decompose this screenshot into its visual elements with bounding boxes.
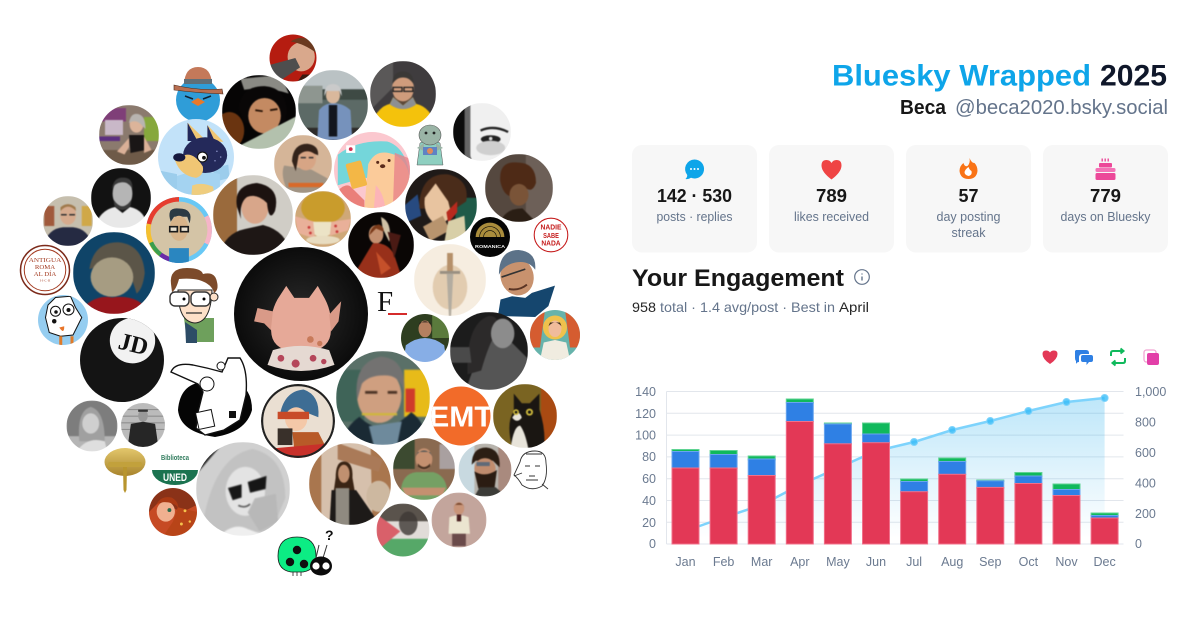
avatar: woman in striped top [309, 443, 391, 525]
avatar: illustrated saint man [530, 310, 580, 360]
avatar: Nadie Sabe Nada: SABE [543, 231, 559, 240]
stat card: days on Bluesky: days on Bluesky [1060, 209, 1151, 224]
avatar: golden pin [104, 448, 146, 493]
avatar: drawn man with rainbow ring [145, 197, 212, 263]
avatar: hands with tea cup [295, 191, 351, 247]
icon: speech bubble [685, 159, 704, 179]
legend icons [1042, 348, 1159, 366]
left axis labels: 20 [642, 516, 656, 530]
avatar: Nadie Sabe Nada: NADA [541, 239, 561, 248]
icon: reposts [1111, 348, 1125, 366]
icon: info [855, 270, 869, 284]
avatar: JD eight ball [80, 318, 164, 402]
stat card: day posting streak: streak [952, 225, 986, 240]
title: Bluesky Wrapped [832, 60, 1091, 92]
month labels: Mar [751, 555, 772, 569]
avatar: Palestine flag overlay [376, 504, 430, 557]
stat card: likes received [769, 145, 894, 252]
right axis labels: 200 [1135, 507, 1156, 521]
avatar: JD eight ball: JD [116, 328, 151, 361]
avatar: pilot illustration [261, 384, 335, 458]
left axis labels: 60 [642, 472, 656, 486]
bar: Apr [786, 399, 813, 544]
stat card: posts and replies: 142 · 530 [657, 185, 732, 206]
avatar: Antigua Roma al Dia [20, 246, 70, 294]
bar: Oct [1015, 472, 1042, 544]
left axis labels: 100 [635, 428, 656, 442]
avatar: woman in hoodie [274, 135, 332, 193]
avatar: man with pencil in mouth [336, 351, 430, 445]
right axis labels [1135, 385, 1166, 551]
engagement chart [635, 385, 1166, 569]
avatar: Biblioteca UNED logo: Biblioteca [161, 453, 190, 462]
right axis labels: 600 [1135, 446, 1156, 460]
avatar: Rembrandt self portrait [485, 154, 553, 222]
icon: heart [822, 160, 842, 180]
avatar: Bluey dog [158, 119, 234, 195]
avatar: pink ceramic cat teapot [234, 247, 368, 381]
avatar: otter with phone [334, 132, 410, 208]
avatar: cartoon fox on blue [38, 295, 88, 345]
avatar: black and white eye [453, 103, 511, 161]
avatar cloud [20, 34, 580, 576]
avatar: EMT logo: EMT [429, 401, 493, 433]
avatar: cat portrait [493, 384, 557, 448]
heading: Your Engagement: Your Engagement [632, 265, 844, 292]
bar: Mar [748, 456, 775, 544]
engagement summary: April [839, 299, 869, 315]
avatar: bearded man looking down [458, 444, 512, 496]
avatar: curly haired woman [213, 175, 293, 255]
avatar: crocodile with book cartoon [171, 358, 252, 437]
stat card: likes received: 789 [816, 185, 847, 206]
left axis labels: 40 [642, 494, 656, 508]
bar: Dec [1091, 513, 1118, 544]
bar: Feb [710, 450, 737, 544]
avatar: small bug with question mark [310, 527, 334, 576]
month labels: Dec [1093, 555, 1116, 569]
bar: Jan [672, 450, 699, 544]
avatar: Nadie Sabe Nada [534, 218, 568, 252]
month labels: Jul [906, 555, 922, 569]
engagement summary: 958 [632, 299, 656, 315]
stat card: posts and replies [632, 145, 757, 252]
avatar: Romanica logo: ROMANICA [475, 244, 506, 250]
bar: Sep [977, 480, 1004, 544]
bar: May [824, 423, 851, 544]
left axis labels: 80 [642, 450, 656, 464]
avatar: black and white woman small [66, 400, 118, 452]
avatar: Antigua Roma al Dia: I·I·C·II [40, 278, 51, 282]
avatar: dagger illustration [414, 244, 486, 316]
avatar: F logo: F [377, 286, 393, 318]
avatar: dark black and white woman [450, 312, 528, 390]
stat card: day posting streak: day posting [936, 209, 1000, 224]
left axis labels: 140 [635, 385, 656, 399]
bar: Jun [862, 423, 890, 544]
avatar: blue bird with hat [174, 67, 223, 122]
avatar: bearded man black and white [91, 168, 151, 228]
avatar: red-haired doll [149, 488, 197, 536]
month labels: May [826, 555, 850, 569]
stat card: days on Bluesky: 779 [1090, 185, 1121, 206]
avatar: painted woman with red hand [405, 169, 477, 241]
bar: Jul [901, 479, 928, 544]
right axis labels: 0 [1135, 537, 1142, 551]
avatar: woman in bookshop [99, 105, 159, 165]
avatar: cartoon man with glasses [170, 268, 218, 343]
bar: Aug [939, 458, 966, 544]
avatar: blonde woman with sunglasses [196, 442, 290, 536]
avatar: man in light blue shirt [401, 314, 449, 362]
avatar: smiling man cutout in blue shirt [496, 250, 555, 317]
stat card: posts and replies: posts · replies [656, 209, 733, 224]
avatar: green mushroom creature [278, 537, 316, 576]
stat card: day posting streak: 57 [958, 185, 978, 206]
month labels: Jan [675, 555, 696, 569]
avatar: Antigua Roma al Dia: ANTIGUA [29, 257, 61, 264]
cumulative area [686, 398, 1105, 544]
avatar: Antigua Roma al Dia: AL DÍA [34, 270, 56, 278]
cumulative line [686, 394, 1108, 531]
bars: red likes, blue replies, green reposts [672, 399, 1118, 544]
month labels: Feb [713, 555, 734, 569]
avatar: EMT logo [429, 386, 493, 446]
icon: likes [1042, 350, 1058, 364]
avatar: red background selfie [270, 34, 316, 82]
avatar: tiara woman [215, 75, 296, 149]
month labels: Jun [866, 555, 886, 569]
icon: replies [1075, 350, 1093, 365]
left axis labels: 0 [649, 537, 656, 551]
user name and handle: @beca2020.bsky.social [955, 97, 1168, 119]
left axis labels: 120 [635, 407, 656, 421]
avatar: smiling man in green shirt [393, 438, 455, 500]
month labels: Aug [941, 555, 963, 569]
month labels: Apr [790, 555, 810, 569]
stat card: likes received: likes received [794, 209, 869, 224]
avatar: painted child on blue [73, 232, 155, 314]
avatar: green Cthulhu mascot [417, 125, 443, 165]
right axis labels: 800 [1135, 416, 1156, 430]
icon: quotes [1144, 350, 1159, 365]
engagement summary: total · 1.4 avg/post · Best in [660, 299, 835, 315]
avatar: Biblioteca UNED logo [152, 453, 198, 485]
month labels: Sep [979, 555, 1001, 569]
avatar: F logo [377, 286, 407, 318]
avatar: man in dark suit on stripes [121, 403, 165, 447]
avatar: small bug with question mark: ? [325, 527, 334, 543]
icon: flame [960, 158, 978, 179]
avatar: man in yellow jacket [370, 61, 436, 127]
stat card: days on Bluesky [1043, 145, 1168, 252]
icon: birthday cake [1096, 158, 1116, 180]
title: 2025 [1100, 60, 1167, 92]
right axis labels: 1,000 [1135, 385, 1166, 399]
avatar: man with glasses and bookshelf [43, 196, 93, 246]
month labels: Nov [1055, 555, 1078, 569]
grid [666, 392, 1124, 544]
month labels: Oct [1019, 555, 1039, 569]
avatar: vintage child photo [432, 492, 486, 548]
avatar: Biblioteca UNED logo: UNED [163, 472, 187, 484]
avatar: Romanica logo [470, 217, 510, 257]
avatar: sketch of heavy man [514, 451, 548, 489]
stat card: day posting streak [906, 145, 1031, 252]
avatar: Nadie Sabe Nada: NADIE [540, 223, 562, 232]
avatar: woman in red dress painting [348, 212, 414, 278]
user name and handle: Beca [900, 97, 947, 119]
month labels [675, 555, 1116, 569]
left axis labels [635, 385, 656, 551]
right axis labels: 400 [1135, 476, 1156, 490]
bar: Nov [1053, 484, 1080, 544]
avatar: woman by river [298, 70, 368, 142]
avatar: Antigua Roma al Dia: ROMA [35, 264, 55, 271]
